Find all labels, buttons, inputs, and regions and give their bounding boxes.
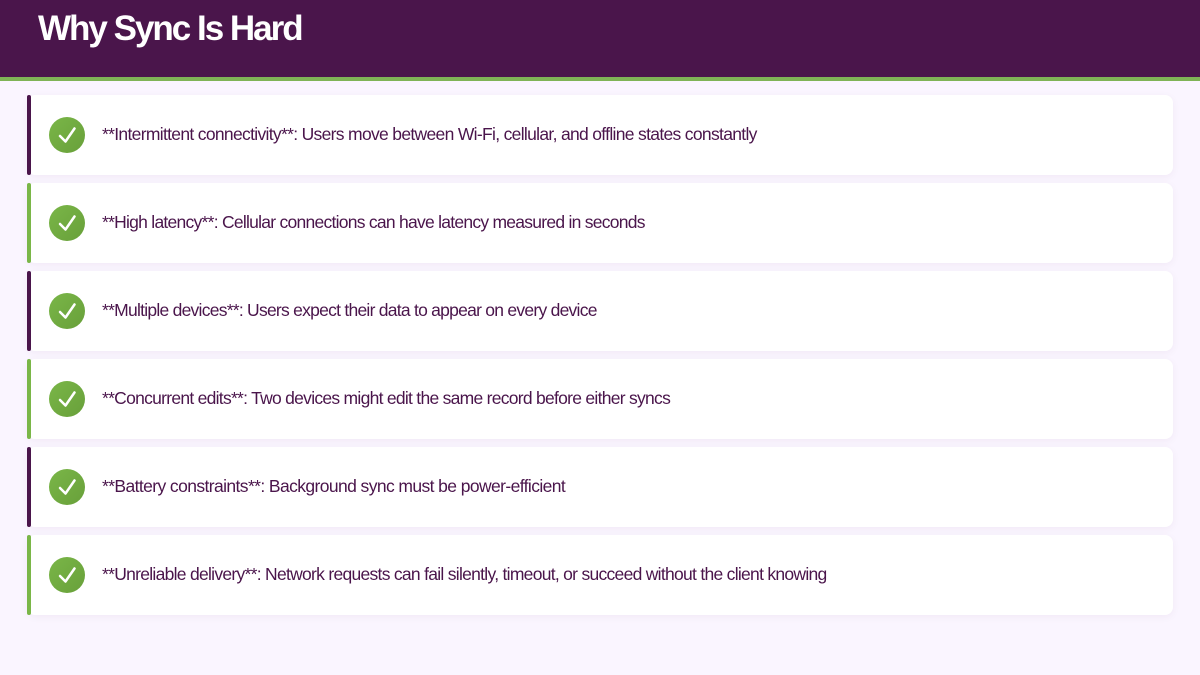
icon: check mark [49, 117, 85, 153]
icon: check mark [49, 205, 85, 241]
card: unreliable delivery [27, 535, 1173, 615]
icon: check mark [49, 381, 85, 417]
card: high latency [27, 183, 1173, 263]
card: battery constraints [27, 447, 1173, 527]
card: multiple devices [27, 271, 1173, 351]
title: Why Sync Is Hard [38, 9, 302, 48]
card: concurrent edits [27, 359, 1173, 439]
accent bar [27, 359, 31, 439]
icon: check mark [49, 293, 85, 329]
text: high latency: **High latency**: Cellular connections can have latency measured in seconds [102, 212, 645, 232]
card: intermittent connectivity [27, 95, 1173, 175]
accent bar [27, 535, 31, 615]
accent bar [27, 271, 31, 351]
text: concurrent edits: **Concurrent edits**: Two devices might edit the same record before either syncs [102, 388, 670, 408]
icon: check mark [49, 469, 85, 505]
accent bar [27, 183, 31, 263]
accent bar [27, 95, 31, 175]
header band [0, 0, 1200, 81]
text: battery constraints: **Battery constraints**: Background sync must be power-efficient [102, 476, 565, 496]
icon: check mark [49, 557, 85, 593]
text: multiple devices: **Multiple devices**: Users expect their data to appear on every device [102, 300, 597, 320]
text: intermittent connectivity: **Intermittent connectivity**: Users move between Wi-Fi, cellular, and offline states constantly [102, 124, 757, 144]
text: unreliable delivery: **Unreliable delivery**: Network requests can fail silently, timeout, or succeed without the client knowing [102, 564, 827, 584]
accent bar [27, 447, 31, 527]
